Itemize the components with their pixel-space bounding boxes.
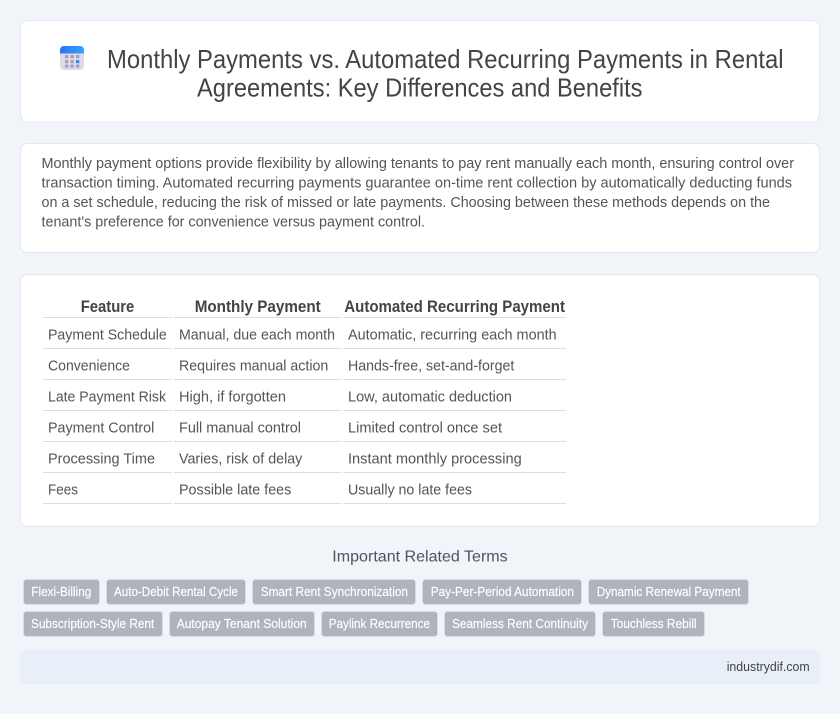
footer bbox=[20, 650, 820, 684]
panel: introduction bbox=[20, 144, 820, 252]
title bbox=[107, 46, 784, 102]
table row: fees: Possible late fees bbox=[179, 482, 291, 498]
panel: title header bbox=[20, 20, 820, 122]
heading: important related terms: Important Related Terms bbox=[332, 549, 508, 566]
tag: Auto-Debit Rental Cycle bbox=[106, 580, 246, 604]
tag: Smart Rent Synchronization bbox=[252, 580, 416, 604]
table row: late payment risk: High, if forgotten bbox=[179, 390, 286, 406]
table row: convenience bbox=[43, 358, 566, 380]
table row: late payment risk: Low, automatic deduction bbox=[348, 390, 512, 406]
table row: fees bbox=[43, 482, 566, 504]
table row: fees: Usually no late fees bbox=[348, 482, 472, 498]
tag: Paylink Recurrence bbox=[322, 612, 438, 636]
title: Monthly Payments vs. Automated Recurring Payments in Rental bbox=[107, 46, 784, 74]
icon: calendar bbox=[60, 46, 84, 70]
tag: Autopay Tenant Solution: Autopay Tenant Solution bbox=[177, 617, 307, 631]
table row: late payment risk: Late Payment Risk bbox=[48, 390, 167, 406]
tag: Dynamic Renewal Payment: Dynamic Renewal Payment bbox=[597, 585, 741, 599]
table row: payment control: Full manual control bbox=[179, 420, 301, 436]
table row: processing time bbox=[43, 452, 566, 472]
table row: convenience: Requires manual action bbox=[179, 358, 328, 374]
tag: Subscription-Style Rent bbox=[24, 612, 162, 636]
table row: convenience: Hands-free, set-and-forget bbox=[348, 358, 514, 374]
tag: Smart Rent Synchronization: Smart Rent Synchronization bbox=[261, 585, 408, 599]
tag: Flexi-Billing: Flexi-Billing bbox=[31, 585, 91, 599]
table row: convenience: Convenience bbox=[48, 358, 130, 374]
tag: Pay-Per-Period Automation bbox=[422, 580, 582, 604]
tag: Pay-Per-Period Automation: Pay-Per-Period Automation bbox=[431, 585, 574, 599]
tag: Paylink Recurrence: Paylink Recurrence bbox=[329, 617, 430, 631]
table header row: Feature bbox=[81, 298, 134, 316]
panel: comparison table bbox=[20, 274, 820, 526]
table row: payment schedule: Payment Schedule bbox=[48, 328, 167, 344]
tag: Flexi-Billing bbox=[24, 580, 100, 604]
tag: Seamless Rent Continuity bbox=[444, 612, 596, 636]
table row: payment schedule: Automatic, recurring each month bbox=[348, 328, 557, 344]
tag: Autopay Tenant Solution bbox=[170, 612, 314, 636]
tag: Subscription-Style Rent: Subscription-Style Rent bbox=[31, 617, 155, 631]
title: Agreements: Key Differences and Benefits bbox=[197, 74, 642, 102]
table row: fees: Fees bbox=[48, 482, 78, 498]
table row: processing time: Processing Time bbox=[48, 452, 155, 468]
text block: introduction paragraph: Monthly payment options provide flexibility by allowing tenants to pay rent manually each month, ensuring control over bbox=[42, 156, 794, 172]
text block: introduction paragraph: transaction timing. Automated recurring payments guarantee on-time rent collection by automatically deducting funds bbox=[42, 176, 792, 192]
table row: payment control: Payment Control bbox=[48, 420, 154, 436]
tag: Touchless Rebill: Touchless Rebill bbox=[611, 617, 697, 631]
table header row: Monthly Payment bbox=[195, 298, 321, 316]
tag: Dynamic Renewal Payment bbox=[588, 580, 748, 604]
table header row: Automated Recurring Payment bbox=[344, 298, 565, 316]
tag list: related terms bbox=[24, 580, 748, 636]
table row: payment schedule: Manual, due each month bbox=[179, 328, 335, 344]
text block: introduction paragraph: tenant's preference for convenience versus payment control. bbox=[42, 214, 425, 230]
table row: processing time: Varies, risk of delay bbox=[179, 452, 303, 468]
table row: late payment risk bbox=[43, 390, 566, 410]
table header row bbox=[43, 298, 566, 318]
footer source text: industrydif.com bbox=[727, 659, 810, 674]
table row: payment control: Limited control once set bbox=[348, 420, 502, 436]
text block: introduction paragraph: on a set schedule, reducing the risk of missed or late payments. Choosing between these methods depends on the bbox=[42, 195, 770, 211]
table row: processing time: Instant monthly processing bbox=[348, 452, 522, 468]
tag: Touchless Rebill bbox=[602, 612, 704, 636]
table row: payment control bbox=[43, 420, 566, 442]
tag: Seamless Rent Continuity: Seamless Rent Continuity bbox=[452, 617, 589, 631]
text block: introduction paragraph bbox=[42, 156, 794, 230]
tag: Auto-Debit Rental Cycle: Auto-Debit Rental Cycle bbox=[114, 585, 238, 599]
table row: payment schedule bbox=[43, 328, 566, 348]
